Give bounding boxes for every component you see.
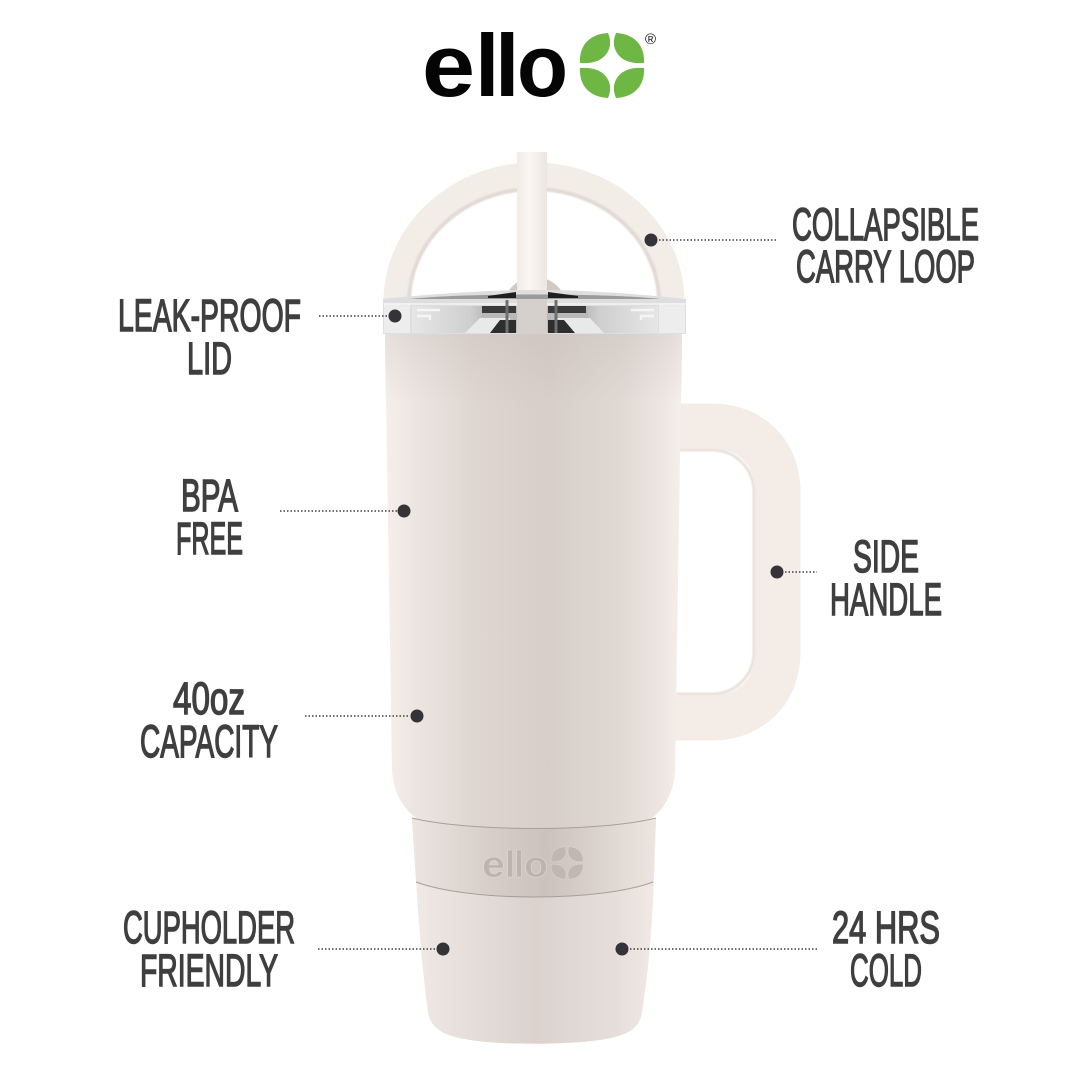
leader <box>770 566 817 578</box>
carry loop <box>397 176 671 302</box>
label: LEAK-PROOF <box>118 290 301 341</box>
embossed wordmark: e <box>482 844 505 885</box>
leader <box>280 504 410 518</box>
tumbler body <box>385 334 682 828</box>
callout: side handle <box>770 531 942 625</box>
collar lines <box>412 818 656 897</box>
body shadow under lid <box>385 334 682 404</box>
embossed wordmark: o <box>524 844 548 885</box>
label: BPA <box>181 470 238 521</box>
straw pivot <box>503 277 567 341</box>
side handle <box>672 426 778 718</box>
label: HANDLE <box>830 574 942 625</box>
callout: collapsible carry loop <box>644 199 979 292</box>
leader <box>319 310 402 322</box>
label: FREE <box>176 513 243 564</box>
embossed wordmark: l <box>505 844 515 885</box>
logo wordmark: e <box>422 16 475 115</box>
leader <box>305 710 424 722</box>
label: LID <box>187 333 232 384</box>
label: SIDE <box>853 531 919 582</box>
logo leaf mark <box>580 33 644 98</box>
callout: 24 hrs cold <box>616 902 940 996</box>
leader <box>318 942 450 956</box>
embossed logo <box>482 844 583 885</box>
tumbler <box>383 152 778 1044</box>
callout: cupholder friendly <box>123 902 450 996</box>
label: CUPHOLDER <box>123 902 295 953</box>
label: CAPACITY <box>140 716 278 767</box>
callout: 40oz capacity <box>140 673 424 767</box>
base <box>412 818 656 1044</box>
lid <box>383 290 686 334</box>
logo wordmark: l <box>475 16 499 115</box>
leader <box>616 942 818 956</box>
logo wordmark: o <box>517 16 568 115</box>
callout: BPA free <box>176 470 410 564</box>
leader <box>644 234 776 246</box>
embossed leaves <box>551 847 583 879</box>
embossed wordmark: l <box>514 844 524 885</box>
logo: ello <box>422 16 656 115</box>
label: COLD <box>850 945 922 996</box>
callout: leak-proof lid <box>118 290 402 384</box>
label: 24 HRS <box>832 902 940 953</box>
straw <box>517 152 547 302</box>
label: FRIENDLY <box>140 945 278 996</box>
registered mark: ® <box>645 31 656 48</box>
label: 40oz <box>173 673 245 724</box>
logo wordmark: l <box>495 16 519 115</box>
collar band <box>412 818 656 897</box>
